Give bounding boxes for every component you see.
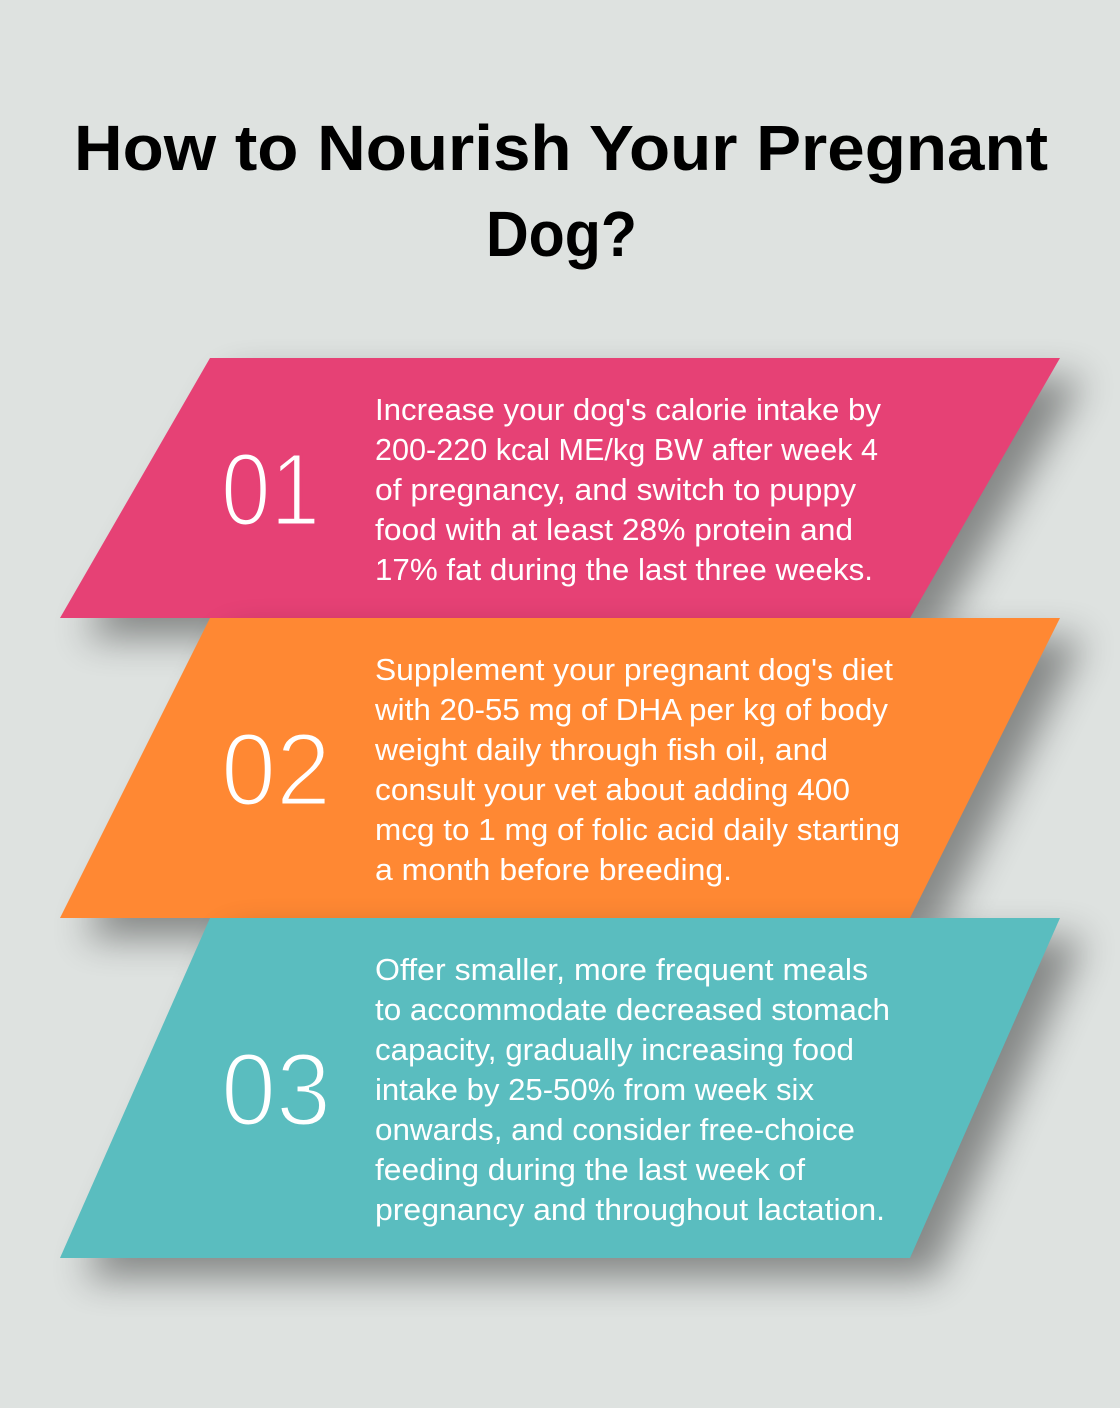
text block 02: a month before breeding.: [375, 852, 732, 887]
panel 02 background: [60, 618, 1060, 918]
text block 03: intake by 25-50% from week six: [375, 1072, 814, 1107]
text block 02: Supplement your pregnant dog's diet: [375, 652, 893, 687]
text block 01: food with at least 28% protein and: [375, 512, 853, 547]
text block 01: 17% fat during the last three weeks.: [375, 552, 873, 587]
title: Dog?: [486, 198, 637, 270]
panel: step 02: [60, 618, 1084, 938]
text block 01: of pregnancy, and switch to puppy: [375, 472, 857, 507]
text block 03: Offer smaller, more frequent meals: [375, 952, 868, 987]
text block 03: capacity, gradually increasing food: [375, 1032, 854, 1067]
number 02: 02: [221, 712, 331, 827]
title: How to Nourish Your Pregnant: [74, 112, 1048, 184]
text block 02: weight daily through fish oil, and: [374, 732, 828, 767]
text block 01: Increase your dog's calorie intake by: [375, 392, 881, 427]
number 01: 01: [221, 432, 320, 547]
text block 03: to accommodate decreased stomach: [375, 992, 890, 1027]
text block 03: feeding during the last week of: [375, 1152, 805, 1187]
title: [74, 112, 1048, 270]
panel 03 background: [60, 918, 1060, 1258]
text block 02: consult your vet about adding 400: [375, 772, 850, 807]
text block 01: 200-220 kcal ME/kg BW after week 4: [375, 432, 878, 467]
panel: step 03: [60, 918, 1084, 1278]
panel: step 01: [60, 358, 1084, 638]
text block 02: mcg to 1 mg of folic acid daily starting: [375, 812, 900, 847]
text block 03: pregnancy and throughout lactation.: [375, 1192, 885, 1227]
panel 01 background: [60, 358, 1060, 618]
text block 01: [375, 392, 881, 587]
number 03: 03: [221, 1032, 331, 1147]
text block 03: onwards, and consider free-choice: [375, 1112, 855, 1147]
text block 03: [375, 952, 890, 1227]
text block 02: with 20-55 mg of DHA per kg of body: [374, 692, 888, 727]
text block 02: [374, 652, 900, 887]
